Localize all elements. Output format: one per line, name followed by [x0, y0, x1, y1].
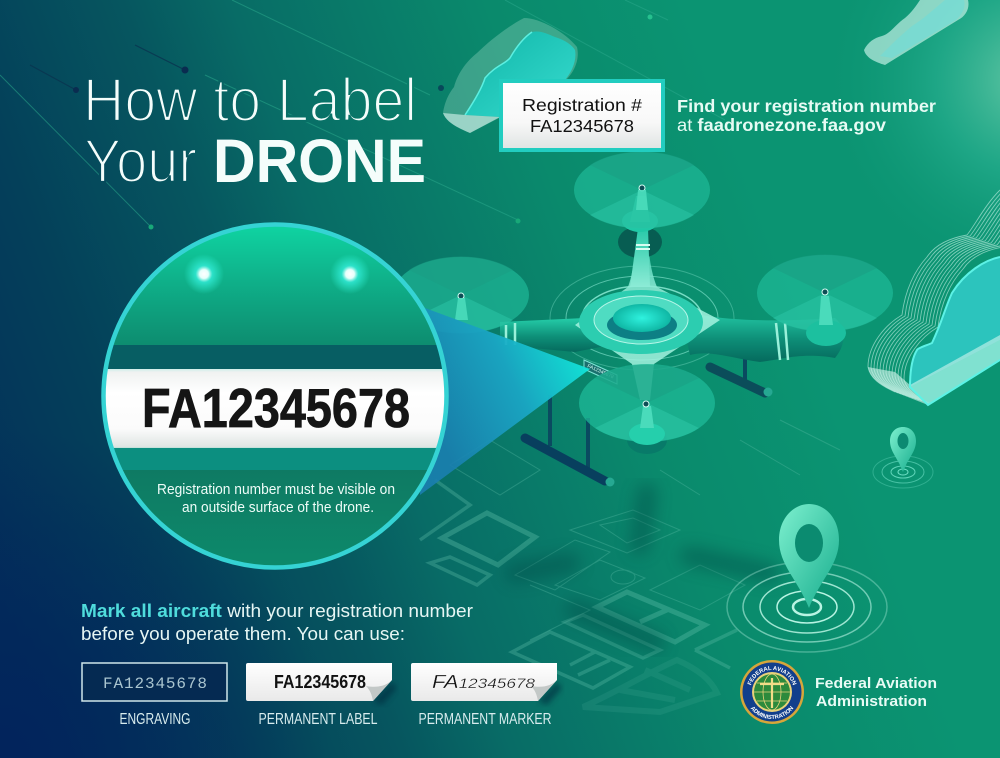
- cloud right wireframe: [868, 190, 1000, 405]
- registration box: [501, 81, 663, 150]
- cloud left: [443, 18, 578, 133]
- registration box: Registration #: [522, 95, 642, 115]
- registration tag on drone: [584, 360, 617, 384]
- option: permanent marker: FA 12345678: [432, 672, 535, 692]
- landing gear: [525, 355, 772, 486]
- FAA name: Federal Aviation: [815, 675, 937, 692]
- title: DRONE: [213, 127, 426, 195]
- option: engraving: [82, 663, 227, 728]
- option: permanent marker: PERMANENT MARKER: [418, 711, 552, 728]
- registration number on lens: FA12345678: [142, 377, 410, 439]
- FAA seal: [740, 660, 804, 724]
- rotor: front: [579, 364, 715, 454]
- FAA seal: ADMINISTRATION: [750, 706, 794, 719]
- cloud top right: [864, 0, 969, 65]
- lens caption: an outside surface of the drone.: [182, 500, 374, 516]
- small location pin: [873, 427, 933, 488]
- registration box: FA12345678: [530, 116, 634, 136]
- option: engraving: FA12345678: [103, 675, 207, 693]
- rings around hub: [550, 266, 734, 370]
- central body: [575, 227, 720, 400]
- large location pin: [727, 504, 887, 652]
- FAA name: Administration: [816, 693, 927, 710]
- lens caption: [157, 482, 395, 516]
- drone ground shadow: [515, 493, 770, 642]
- rotor: right: [757, 254, 893, 346]
- magnifier beam: [420, 308, 590, 495]
- background streaks: [0, 0, 725, 230]
- magnifier lens: [100, 222, 450, 572]
- FAA name: [815, 675, 937, 710]
- option: permanent label: [246, 663, 397, 728]
- title: Your: [84, 127, 197, 195]
- rotor: left: [393, 256, 529, 334]
- find registration text: Find your registration number: [677, 96, 936, 116]
- rear motor: [618, 196, 662, 287]
- city map ground: [420, 420, 840, 712]
- option: permanent label: FA12345678: [274, 672, 366, 692]
- title: How to Label: [83, 66, 417, 134]
- registration tag on drone: FA12345678: [586, 363, 615, 380]
- rotor: rear: [574, 151, 710, 229]
- find registration text: [677, 96, 936, 135]
- option: engraving: ENGRAVING: [120, 711, 190, 728]
- mark all aircraft instruction: Mark all aircraft with your registration number: [81, 601, 473, 621]
- arms: [500, 310, 844, 362]
- find registration text: at faadronezone.faa.gov: [677, 115, 886, 135]
- option: permanent label: PERMANENT LABEL: [258, 711, 378, 728]
- drone: [393, 151, 893, 486]
- mark all aircraft instruction: [81, 601, 473, 644]
- lens caption: Registration number must be visible on: [157, 482, 395, 498]
- mark all aircraft instruction: before you operate them. You can use:: [81, 624, 405, 644]
- option: permanent marker: [411, 663, 562, 728]
- title: [83, 66, 426, 195]
- FAA seal: FEDERAL AVIATION: [747, 666, 797, 686]
